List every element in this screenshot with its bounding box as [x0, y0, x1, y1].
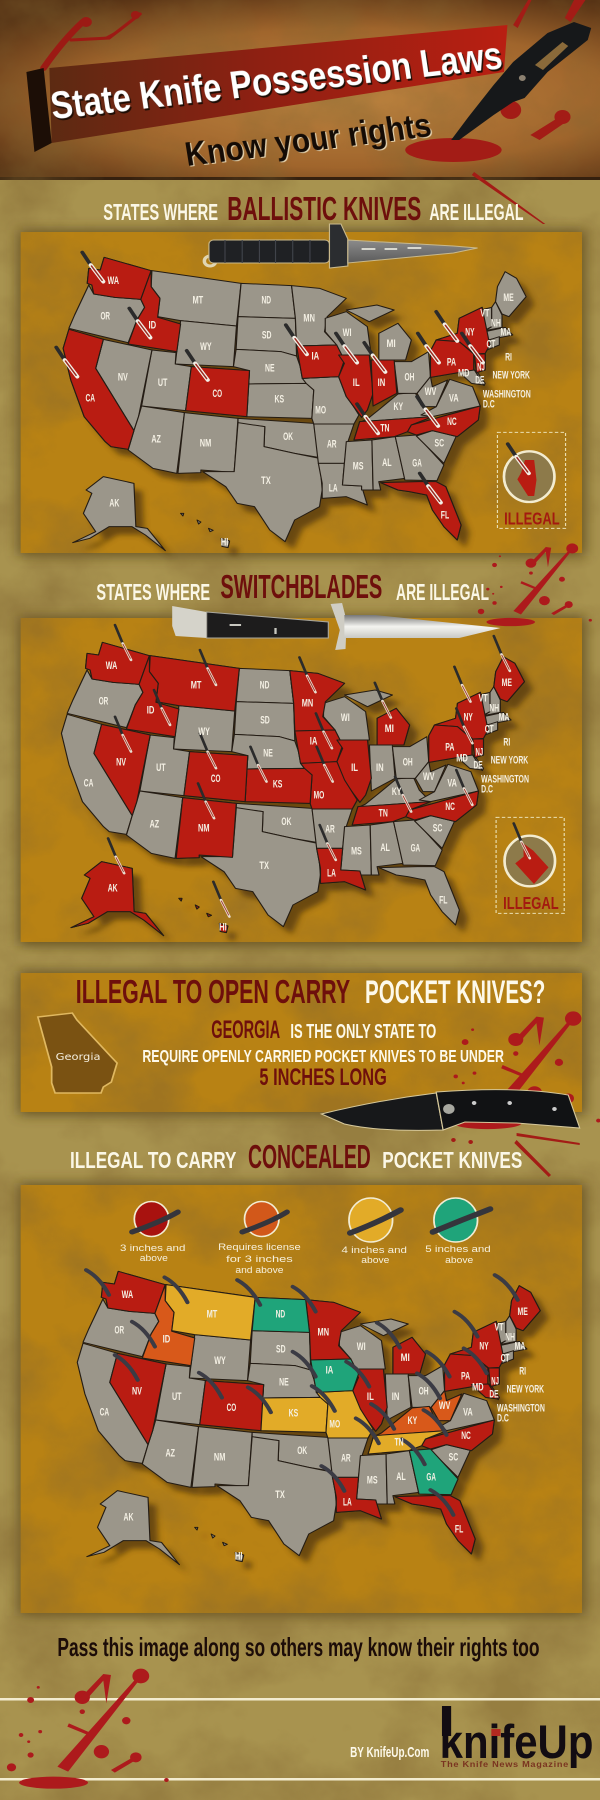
state labels: UT	[156, 761, 166, 774]
text: Georgia rule: IS THE ONLY STATE TO	[290, 1020, 436, 1043]
blood splatter: switchblades panel corner	[478, 543, 592, 626]
panel: ballistic knives map background	[21, 232, 582, 553]
state labels: OR	[100, 309, 110, 322]
state labels: CT	[501, 1351, 510, 1364]
state labels: WA	[122, 1288, 133, 1301]
state labels: MO	[329, 1417, 340, 1430]
state labels: ID	[163, 1332, 171, 1345]
legend: illegal: ILLEGAL	[503, 893, 559, 914]
state labels: OK	[281, 815, 292, 828]
state labels: KS	[275, 392, 284, 405]
map shadow	[72, 265, 535, 559]
state labels: FL	[455, 1522, 463, 1535]
state labels: IN	[378, 376, 385, 389]
state labels: ME	[503, 291, 514, 304]
map: ballistic knives illegal	[56, 252, 566, 559]
state labels: MN	[303, 311, 315, 324]
state labels: TX	[259, 859, 269, 872]
state labels: D.C	[497, 1411, 509, 1424]
legend: 5 inches and above: 5 inches and	[425, 1245, 491, 1255]
legend: requires license	[218, 1202, 301, 1276]
state labels: ID	[147, 703, 155, 716]
state labels: SC	[434, 436, 444, 449]
header bottom edge	[0, 177, 600, 180]
state labels: MA	[499, 710, 510, 723]
state labels: HI	[235, 1549, 243, 1562]
state labels: IL	[353, 376, 360, 389]
state labels: AL	[382, 456, 392, 469]
state labels: GA	[411, 841, 420, 854]
state labels: PA	[461, 1369, 470, 1382]
ribbon end bar	[26, 68, 52, 152]
state labels: NV	[118, 370, 128, 383]
state labels: WY	[214, 1354, 226, 1367]
state labels: MS	[351, 844, 362, 857]
state labels: D.C	[483, 397, 495, 410]
heading: switchblades	[96, 568, 489, 606]
panel: open carry background	[21, 973, 582, 1112]
state labels: NM	[214, 1450, 225, 1463]
state labels	[86, 274, 531, 548]
state labels: WY	[200, 340, 212, 353]
subtitle: Know your rights	[182, 106, 434, 173]
state labels: MD	[458, 366, 470, 379]
legend: 4 inches and above: 4 inches and	[342, 1246, 407, 1256]
state labels: OK	[283, 430, 293, 443]
state labels: FL	[439, 893, 448, 906]
state labels: MO	[314, 788, 324, 801]
state labels: MA	[515, 1339, 526, 1352]
state labels: MI	[401, 1351, 410, 1364]
state labels: MO	[315, 403, 326, 416]
state labels: LA	[327, 866, 336, 879]
state labels: ID	[148, 318, 156, 331]
state labels: OR	[99, 694, 109, 707]
state labels: DE	[489, 1387, 499, 1400]
state labels: WI	[341, 711, 350, 724]
state labels: NE	[265, 361, 275, 374]
state labels: AR	[327, 437, 337, 450]
state labels: IN	[392, 1390, 399, 1403]
map shadow	[70, 650, 533, 944]
state labels: KS	[289, 1406, 298, 1419]
state labels: NE	[279, 1375, 289, 1388]
state labels: KS	[273, 777, 282, 790]
state labels: NM	[200, 436, 211, 449]
state labels: VT	[480, 306, 490, 319]
state labels: HI	[219, 920, 227, 933]
legend: requires license: Requires license	[218, 1243, 301, 1253]
state labels: MA	[501, 325, 511, 338]
state labels: CT	[485, 722, 494, 735]
state labels: NJ	[477, 360, 485, 373]
state labels: MN	[302, 696, 313, 709]
legend: requires license: and above	[235, 1266, 284, 1276]
state labels	[84, 659, 529, 933]
state labels: OH	[403, 755, 413, 768]
states	[61, 642, 524, 936]
icon: ballistic knife	[204, 224, 478, 268]
legend: 4 inches and above	[342, 1198, 407, 1266]
state labels: NC	[445, 800, 455, 813]
state labels: NY	[464, 710, 473, 723]
state labels: TN	[380, 421, 390, 434]
state labels: CO	[211, 772, 220, 785]
legend: 5 inches and above	[425, 1198, 491, 1266]
state labels: VT	[494, 1320, 504, 1333]
state labels: MD	[456, 751, 468, 764]
heading: open carry: ILLEGAL TO OPEN CARRY	[76, 973, 350, 1010]
state labels: WI	[357, 1340, 366, 1353]
state labels: ND	[276, 1307, 285, 1320]
map: concealed pocket knives	[77, 1270, 549, 1573]
blood splatter: header right	[405, 0, 585, 224]
blood trail below pocket knife	[451, 1133, 580, 1177]
heading: switchblades: SWITCHBLADES	[220, 568, 382, 605]
state labels: NEW YORK	[492, 368, 530, 381]
state labels: OR	[115, 1323, 124, 1336]
state labels: TX	[275, 1488, 285, 1501]
state labels: SD	[276, 1342, 286, 1355]
map shadow	[86, 1279, 549, 1573]
state labels: VA	[447, 776, 457, 789]
state labels: IA	[311, 349, 319, 362]
legend: illegal: ILLEGAL	[504, 509, 560, 529]
state labels: OH	[404, 370, 414, 383]
state labels: AK	[108, 881, 118, 894]
heading: concealed: POCKET KNIVES	[382, 1148, 522, 1174]
state labels: CA	[100, 1405, 109, 1418]
state labels: NC	[461, 1429, 471, 1442]
icon: Georgia state map: Georgia	[56, 1051, 101, 1063]
state labels: SD	[260, 713, 270, 726]
legend: illegal	[496, 817, 564, 914]
state labels: D.C	[481, 782, 493, 795]
state labels: DE	[475, 373, 484, 386]
state labels: DE	[474, 758, 483, 771]
state labels: AL	[396, 1470, 406, 1483]
state labels: KY	[408, 1414, 417, 1427]
state labels: NJ	[491, 1374, 499, 1387]
state labels: NH	[505, 1330, 515, 1343]
icon: header folding knife	[451, 22, 591, 140]
state labels: AR	[341, 1451, 351, 1464]
heading: switchblades: STATES WHERE	[96, 580, 210, 606]
state labels	[100, 1288, 545, 1562]
heading: ballistic knives: BALLISTIC KNIVES	[227, 190, 421, 227]
state labels: NY	[465, 325, 475, 338]
states	[77, 1271, 540, 1565]
state labels: IA	[326, 1363, 334, 1376]
state labels: KY	[394, 400, 403, 413]
state labels: CA	[84, 776, 94, 789]
legend: illegal	[497, 432, 566, 529]
state labels: OK	[297, 1444, 307, 1457]
byline: BY KnifeUp.Com	[350, 1744, 429, 1761]
state labels: WA	[108, 274, 119, 287]
state labels: WV	[439, 1399, 450, 1412]
state labels: WASHINGTON	[497, 1401, 545, 1414]
icon: pocket knife	[321, 1090, 580, 1130]
state labels: WV	[423, 770, 435, 783]
state labels: VT	[478, 691, 488, 704]
state labels: KY	[392, 785, 401, 798]
state labels: TN	[394, 1435, 404, 1448]
state labels: WA	[106, 659, 118, 672]
legend: 3 inches and above	[120, 1202, 185, 1264]
state labels: NEW YORK	[491, 753, 529, 766]
state labels: NEW YORK	[507, 1382, 544, 1395]
state labels: LA	[329, 481, 338, 494]
knife pins	[56, 252, 483, 503]
legend: requires license: for 3 inches	[226, 1255, 293, 1265]
text: Georgia rule	[142, 1016, 504, 1091]
state labels: PA	[447, 355, 456, 368]
state labels: TN	[379, 806, 388, 819]
state labels: AZ	[151, 432, 161, 445]
state labels: UT	[172, 1390, 182, 1403]
title ribbon	[49, 25, 507, 143]
icon: Georgia state map	[38, 1013, 117, 1093]
state labels: WASHINGTON	[481, 772, 529, 785]
legend: 3 inches and above: 3 inches and	[120, 1244, 185, 1254]
state labels: OH	[419, 1384, 429, 1397]
state labels: WASHINGTON	[483, 387, 531, 400]
state labels: ND	[262, 293, 271, 306]
header banner background	[0, 0, 600, 178]
state labels: AR	[325, 822, 335, 835]
state labels: NJ	[475, 745, 483, 758]
state labels: WY	[198, 725, 210, 738]
state labels: VA	[463, 1405, 473, 1418]
knife pins	[86, 1270, 518, 1515]
state labels: MT	[192, 293, 204, 306]
state labels: IN	[376, 761, 384, 774]
state labels: WI	[343, 326, 351, 339]
blood splatter: open carry	[442, 1011, 600, 1129]
state labels: MT	[191, 678, 202, 691]
state labels: PA	[445, 740, 455, 753]
legend: 5 inches and above: above	[445, 1256, 473, 1266]
state labels: NH	[489, 701, 499, 714]
heading: ballistic knives	[103, 190, 523, 227]
blood splatter: header left	[44, 11, 140, 110]
text: Georgia rule: GEORGIA	[211, 1016, 280, 1044]
heading: switchblades: ARE ILLEGAL	[396, 580, 489, 606]
panel shadows	[18, 230, 585, 1616]
state labels: MI	[385, 722, 394, 735]
state labels: RI	[505, 350, 512, 363]
state labels: MD	[472, 1380, 484, 1393]
state labels: AL	[380, 841, 390, 854]
state labels: CO	[213, 387, 222, 400]
state labels: WV	[425, 385, 436, 398]
blood splatter: footer	[7, 1669, 169, 1789]
heading: concealed	[70, 1138, 522, 1175]
state labels: ME	[502, 676, 512, 689]
state labels: AK	[124, 1510, 134, 1523]
state labels: IL	[367, 1390, 374, 1403]
state labels: CT	[487, 337, 496, 350]
footer rule top	[0, 1698, 600, 1700]
legend: 3 inches and above: above	[140, 1254, 168, 1264]
heading: concealed: CONCEALED	[248, 1138, 371, 1175]
state labels: MN	[318, 1325, 329, 1338]
state labels: NY	[479, 1339, 489, 1352]
map: switchblades illegal	[61, 625, 564, 944]
logo: KnifeUp: The Knife News Magazine	[441, 1760, 568, 1769]
panel: switchblades map background	[21, 618, 582, 942]
knife pins	[108, 625, 510, 917]
state labels: NM	[198, 821, 210, 834]
state labels: NE	[263, 746, 273, 759]
text: Georgia rule: 5 INCHES LONG	[259, 1065, 387, 1091]
state labels: VA	[449, 391, 459, 404]
footer rule bottom	[0, 1778, 600, 1780]
state labels: SD	[262, 328, 272, 341]
state labels: FL	[441, 508, 449, 521]
legend: 4 inches and above: above	[361, 1256, 389, 1266]
icon: switchblade	[172, 603, 501, 650]
state labels: NV	[116, 755, 126, 768]
state labels: SC	[433, 821, 443, 834]
state labels: MI	[386, 337, 396, 350]
state labels: MS	[353, 459, 364, 472]
state labels: AZ	[165, 1446, 175, 1459]
state labels: SC	[449, 1450, 458, 1463]
state labels: NC	[447, 415, 457, 428]
state labels: MS	[367, 1473, 378, 1486]
state labels: UT	[158, 376, 168, 389]
state labels: IL	[351, 761, 358, 774]
state labels: AZ	[150, 817, 159, 830]
state labels: TX	[261, 474, 271, 487]
state labels: GA	[412, 456, 422, 469]
state labels: NH	[491, 316, 501, 329]
state labels: IA	[310, 734, 318, 747]
state labels: CA	[86, 391, 95, 404]
state labels: MT	[207, 1307, 218, 1320]
state labels: RI	[519, 1364, 526, 1377]
state labels: ME	[517, 1305, 528, 1318]
state labels: ND	[260, 678, 270, 691]
state labels: AK	[109, 496, 120, 509]
heading: ballistic knives: STATES WHERE	[103, 200, 218, 226]
state labels: LA	[343, 1495, 352, 1508]
state labels: NV	[132, 1384, 142, 1397]
states	[63, 257, 526, 551]
panel: concealed carry map background	[21, 1185, 582, 1613]
state labels: RI	[503, 735, 510, 748]
heading: concealed: ILLEGAL TO CARRY	[70, 1148, 237, 1174]
state labels: CO	[227, 1401, 236, 1414]
state labels: HI	[221, 535, 228, 548]
state labels: GA	[426, 1470, 436, 1483]
